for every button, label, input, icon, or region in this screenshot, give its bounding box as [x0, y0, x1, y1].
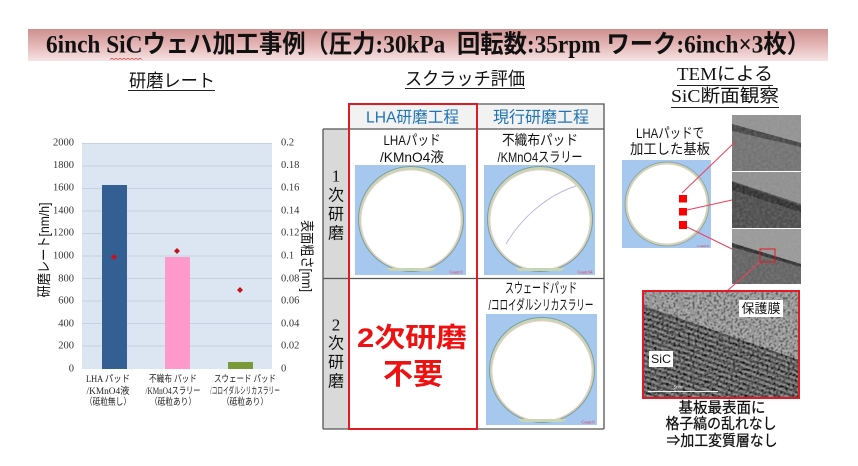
row header column: 研 [328, 354, 344, 372]
wafer: suede second polish: Count:0 [582, 420, 594, 424]
header cells: 現行研磨工程 [493, 108, 589, 126]
red position markers and leader lines [679, 142, 775, 291]
header cells: LHA研磨工程 [366, 108, 459, 126]
category labels: （砥粒無し） [85, 396, 131, 408]
conclusion text [666, 400, 778, 450]
category labels: /KMnO4液 [86, 386, 130, 397]
roughness markers [111, 248, 243, 293]
wafer: nonwoven first polish with scratch: Count:64 [578, 270, 592, 274]
wafer: TEM sample positions: Count:0 [697, 244, 709, 248]
row header column: 次 [328, 186, 344, 204]
cell label: LHA pad [380, 132, 444, 165]
right axis ticks: 0.04 [281, 318, 300, 330]
row header column: 次 [328, 334, 344, 352]
row header column: 研 [328, 206, 344, 224]
heading: TEM cross-section observation: TEMによる [677, 64, 773, 84]
wafer: nonwoven first polish with scratch [484, 165, 595, 275]
caption: substrate processed with LHA pad: LHAパッドで [636, 125, 704, 141]
category labels: LHA パッド [86, 374, 130, 385]
wafer: TEM sample positions [622, 160, 711, 248]
conclusion text: 格子縞の乱れなし [666, 416, 776, 432]
heading: polishing rate: 研磨レート [129, 71, 215, 91]
cell label: nonwoven pad: /KMnO4スラリー [498, 149, 582, 165]
conclusion text: 基板最表面に [678, 400, 766, 416]
left axis ticks: 1200 [53, 228, 74, 238]
category labels: スウェード パッド [214, 374, 276, 385]
cell label: suede pad: スウェードパッド [505, 280, 577, 296]
right axis ticks: 0.14 [281, 206, 300, 216]
left axis ticks: 1800 [53, 160, 74, 171]
left axis ticks: 1400 [53, 206, 74, 216]
left axis ticks: 400 [58, 318, 74, 330]
category labels [85, 373, 280, 408]
heading: TEM cross-section observation [671, 64, 779, 108]
cell label: suede pad: /コロイダルシリカスラリー [488, 297, 594, 313]
wafer: LHA first polish [355, 165, 466, 275]
row header column [323, 129, 349, 429]
high-resolution TEM image: SiC [651, 352, 671, 366]
row header column: 2 [332, 316, 340, 334]
bar chart: polishing rate and surface roughness [36, 138, 315, 408]
callout: second polish not required: 2次研磨 [357, 323, 467, 353]
heading: scratch evaluation: スクラッチ評価 [405, 69, 525, 89]
right axis ticks: 0 [281, 364, 286, 374]
category labels: /KMnO4スラリー [146, 386, 200, 397]
wafer: LHA first polish: Count:0 [450, 270, 462, 274]
category labels: 不織布 パッド [149, 373, 197, 385]
high-resolution TEM image [643, 291, 799, 398]
conclusion text: ⇒加工変質層なし [666, 432, 778, 450]
cell label: nonwoven pad: 不織布パッド [502, 132, 578, 148]
high-resolution TEM image: 保護膜 [742, 301, 780, 316]
category labels: （砥粒あり） [222, 396, 268, 408]
left axis ticks: 800 [58, 274, 74, 284]
bars [102, 185, 253, 369]
left axis ticks: 200 [58, 340, 74, 352]
row header column: 磨 [328, 372, 344, 390]
TEM image 2 [732, 172, 801, 228]
right axis ticks: 0.12 [281, 228, 299, 238]
left axis ticks: 2000 [53, 138, 74, 148]
row header column: 1 [332, 166, 340, 186]
header cells [349, 104, 604, 129]
title band: 6inch SiCウェハ加工事例（圧力:30kPa 回転数:35rpm ワーク:6inch×3枚） [46, 30, 810, 58]
right axis ticks: 0.02 [281, 340, 299, 352]
right axis ticks: 0.2 [281, 138, 294, 148]
callout: second polish not required [357, 323, 467, 391]
right axis ticks: 0.08 [281, 274, 299, 284]
wafer: suede second polish [486, 314, 597, 425]
right axis title: 表面粗さ[nm] [299, 220, 315, 292]
right axis ticks [281, 138, 300, 374]
category labels: （砥粒あり） [150, 396, 196, 408]
callout: second polish not required: 不要 [383, 359, 443, 391]
right axis ticks: 0.06 [281, 296, 299, 306]
left axis ticks: 1000 [53, 250, 74, 262]
caption: substrate processed with LHA pad [630, 125, 710, 157]
scratch evaluation table [323, 104, 604, 429]
right axis ticks: 0.1 [281, 250, 294, 262]
row header column: 磨 [328, 224, 344, 242]
right axis ticks: 0.18 [281, 160, 299, 171]
left axis title: 研磨レート[nm/h] [36, 202, 52, 298]
table lines [323, 104, 604, 429]
left axis ticks: 0 [69, 364, 74, 374]
TEM image 1 [732, 115, 801, 171]
left axis ticks [53, 138, 74, 374]
TEM observation panel [622, 115, 801, 450]
cell label: nonwoven pad [498, 132, 582, 165]
high-resolution TEM image: 5nm [674, 384, 683, 390]
right axis ticks: 0.16 [281, 182, 299, 194]
cell label: LHA pad: /KMnO4液 [380, 149, 444, 165]
category labels: /コロイダルシリカスラリー [210, 385, 280, 397]
left axis ticks: 1600 [53, 182, 74, 194]
caption: substrate processed with LHA pad: 加工した基板 [630, 141, 710, 157]
red highlight frame: LHA column [349, 104, 477, 429]
cell label: LHA pad: LHAパッド [384, 132, 440, 148]
heading: TEM cross-section observation: SiC断面観察 [671, 86, 779, 106]
TEM image 3 [732, 229, 801, 284]
cell label: suede pad [488, 280, 594, 313]
left axis ticks: 600 [58, 296, 74, 306]
